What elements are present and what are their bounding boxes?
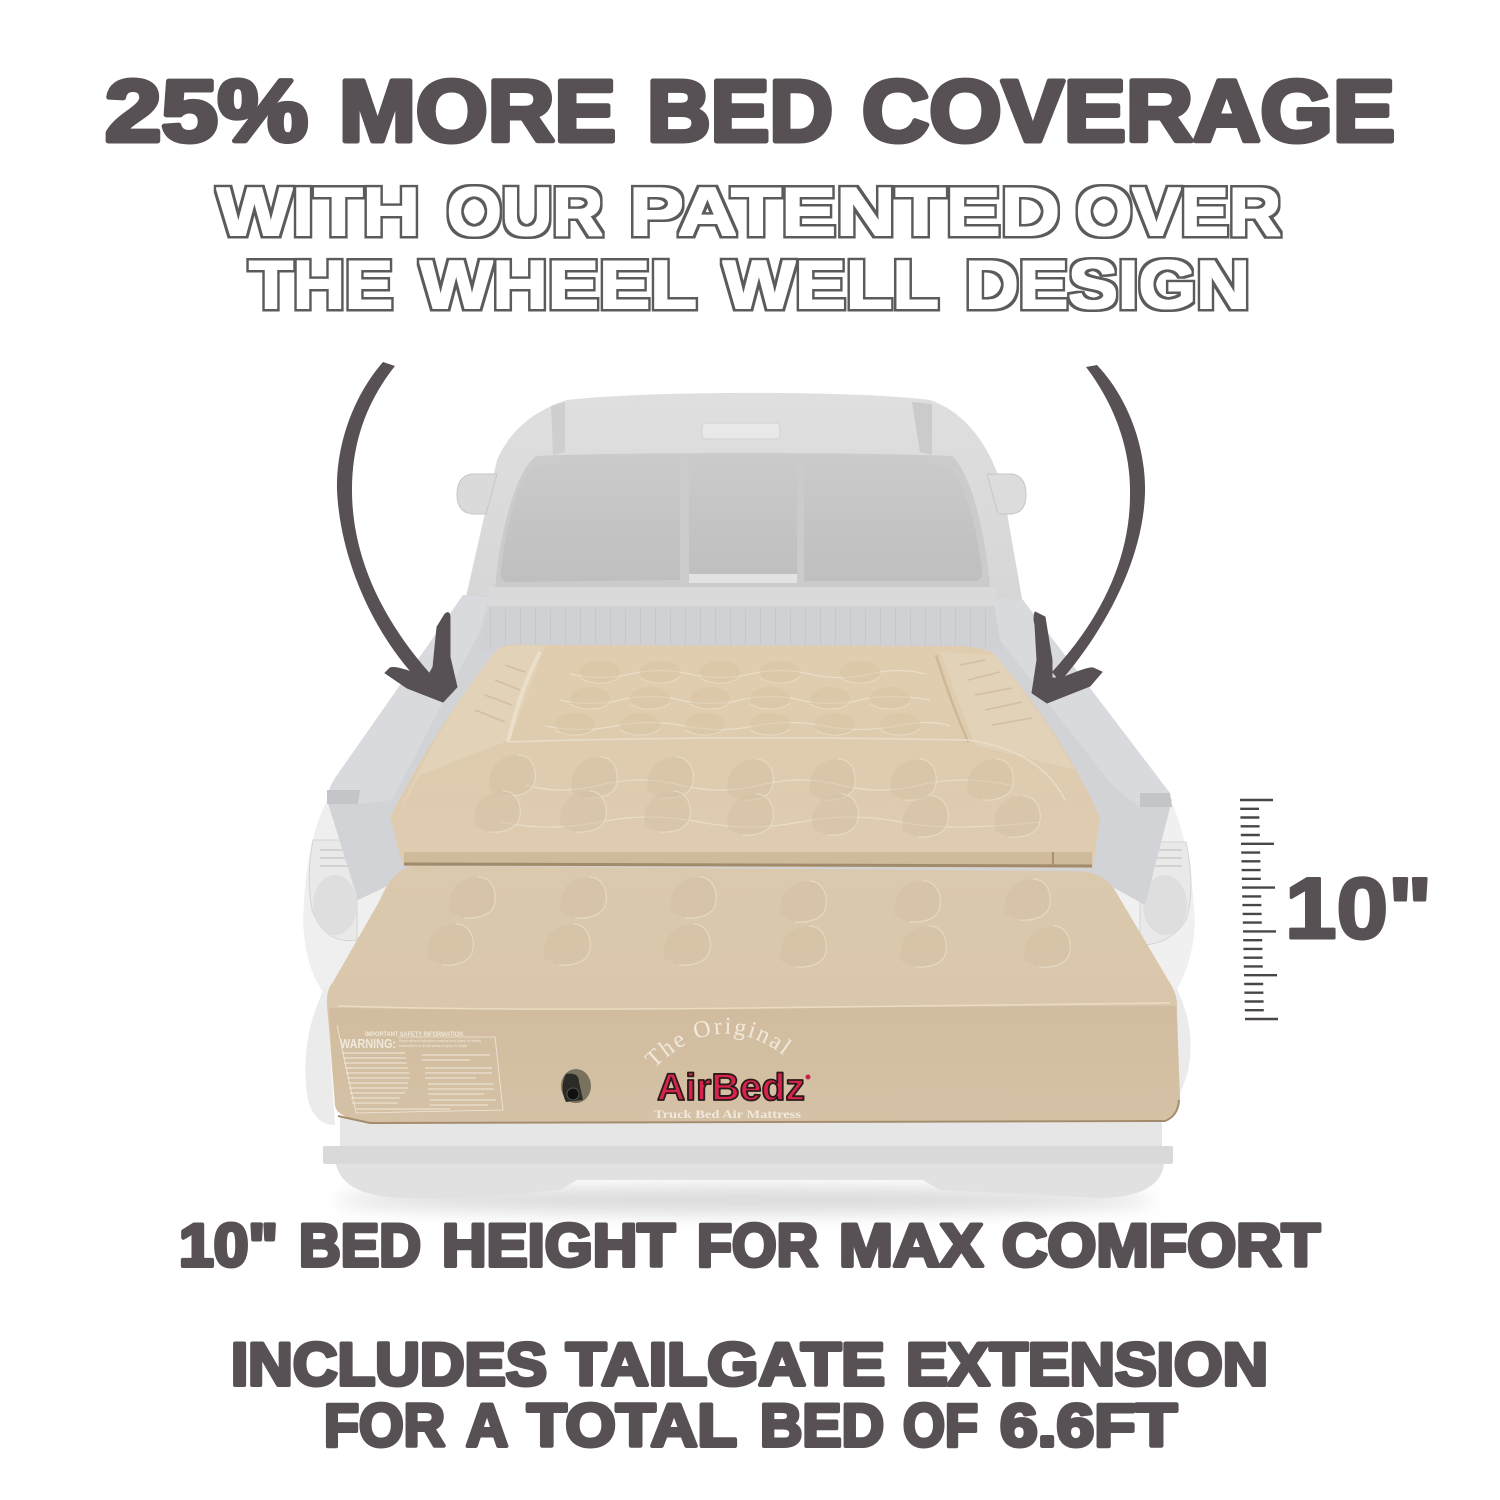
AirBedz logo: The Original <box>644 1018 792 1066</box>
right rail cap <box>1140 793 1172 807</box>
bed height caption: BED <box>299 1212 421 1279</box>
title: 25% <box>105 63 308 160</box>
tailgate extension caption: OF <box>903 1392 978 1459</box>
subtitle outline text <box>217 174 1281 323</box>
bed height caption: MAX <box>839 1212 983 1279</box>
subtitle outline text: WITH <box>217 174 420 250</box>
truck cab <box>463 393 1024 610</box>
truck bed interior <box>327 595 1172 905</box>
left arrow <box>337 362 457 702</box>
mattress <box>326 644 1180 1124</box>
safety warning label <box>337 1025 503 1113</box>
subtitle outline text: DESIGN <box>965 247 1250 323</box>
tailgate extension caption <box>231 1331 1268 1459</box>
left rail cap <box>327 790 360 804</box>
bed height caption: COMFORT <box>1002 1212 1320 1279</box>
front mattress tufts <box>427 877 1070 967</box>
cab sill <box>488 587 996 607</box>
tailgate extension caption: 6.6FT <box>1000 1392 1177 1459</box>
safety warning label: Read airbed instruction manual and follow all safety <box>399 1039 481 1043</box>
AirBedz logo: AirBedz <box>657 1067 805 1109</box>
tailgate extension caption: TAILGATE <box>566 1331 885 1398</box>
bed rear wall <box>478 606 1004 650</box>
subtitle outline text: WHEEL <box>420 247 697 323</box>
height label: 10" <box>1285 861 1432 957</box>
AirBedz logo: Truck Bed Air Mattress <box>654 1107 801 1121</box>
title: COVERAGE <box>862 63 1395 160</box>
truck illustration <box>303 393 1195 1213</box>
subtitle outline text: OUR <box>447 174 603 250</box>
front mattress extension <box>326 866 1180 1124</box>
tailgate extension caption: BED <box>760 1392 884 1459</box>
subtitle outline text: THE <box>249 247 393 323</box>
subtitle outline text: PATENTED <box>629 174 1060 250</box>
safety warning label: IMPORTANT SAFETY INFORMATION <box>365 1031 463 1038</box>
bed height caption: HEIGHT <box>442 1212 675 1279</box>
rear mattress tufts <box>474 661 1040 837</box>
subtitle outline text: WELL <box>723 247 939 323</box>
rear mattress section <box>390 645 1100 868</box>
side mirrors <box>457 474 1026 514</box>
tailgate <box>323 1118 1173 1198</box>
height ruler <box>1240 800 1278 1019</box>
title: MORE <box>339 63 616 160</box>
title: BED <box>647 63 833 160</box>
right bed rail <box>993 598 1172 807</box>
tail lights and rear body <box>303 800 1195 1125</box>
bed height caption <box>179 1212 1320 1279</box>
left bed rail <box>327 595 490 804</box>
right arrow <box>1032 365 1145 703</box>
bed height caption: 10" <box>179 1212 278 1279</box>
tailgate extension caption: INCLUDES <box>231 1331 547 1398</box>
tailgate extension caption: TOTAL <box>527 1392 737 1459</box>
rear window <box>501 460 982 583</box>
inflation valve <box>561 1069 591 1103</box>
tailgate extension caption: FOR <box>324 1392 445 1459</box>
safety warning label: WARNING: <box>340 1036 396 1051</box>
safety warning label: instructions to avoid serious injury or death. <box>399 1044 468 1048</box>
tailgate extension caption: EXTENSION <box>906 1331 1268 1398</box>
tailgate extension caption: A <box>466 1392 508 1459</box>
subtitle outline text: OVER <box>1076 174 1281 250</box>
AirBedz logo <box>644 1018 810 1121</box>
title <box>105 63 1395 160</box>
bed height caption: FOR <box>697 1212 818 1279</box>
